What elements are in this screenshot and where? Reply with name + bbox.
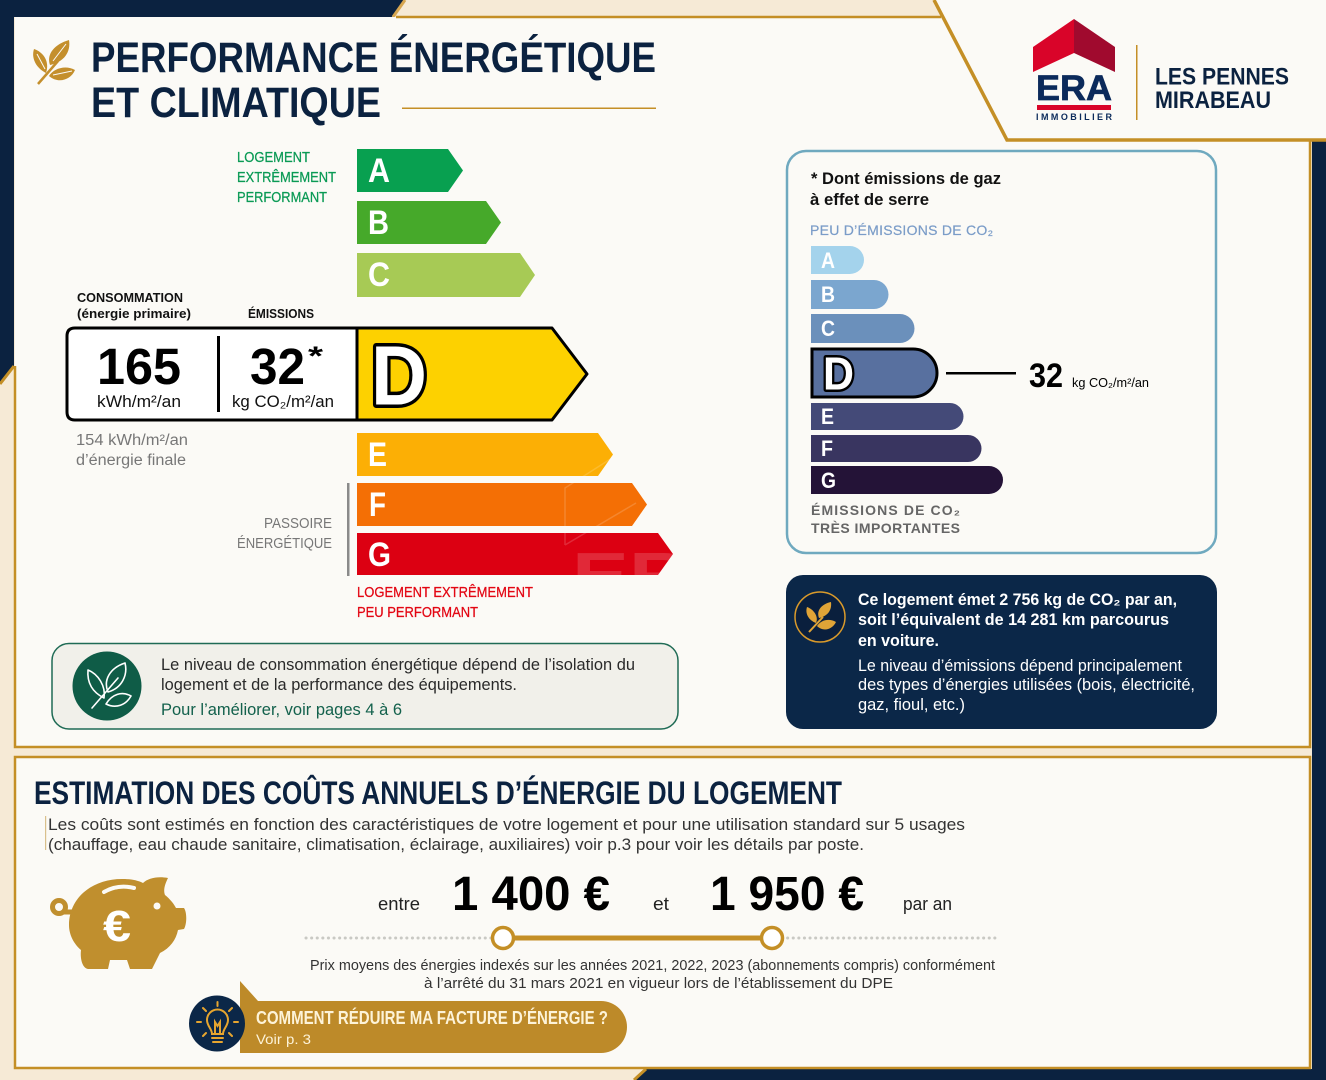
costs description: (chauffage, eau chaude sanitaire, climatisation, éclairage, auxiliaires) voir p.3 pour voir les détails par poste. [48, 835, 864, 854]
title rule [402, 108, 656, 109]
price range values: entre [378, 894, 420, 914]
costs description [45, 815, 965, 854]
energy bar D current: D [371, 328, 427, 422]
current rating box: * [308, 341, 324, 371]
final energy note: d’énergie finale [76, 452, 186, 469]
price range values: 1 950 € [710, 868, 864, 921]
logo: ERA Immobilier [1033, 19, 1115, 122]
price range scale [306, 928, 999, 948]
climate bar E: E [821, 404, 834, 429]
climate value [1029, 357, 1149, 395]
greenhouse gas heading [810, 169, 1001, 209]
energy bar A: A [368, 152, 390, 190]
label: high emissions: TRÈS IMPORTANTES [811, 520, 960, 536]
callout: emissions [786, 575, 1217, 729]
energy bar F: F [369, 486, 386, 524]
current rating box: kg CO₂/m²/an [232, 393, 334, 411]
climate bar D current: D [823, 348, 854, 400]
logo: ERA Immobilier: IMMOBILIER [1036, 112, 1112, 122]
costs description: Les coûts sont estimés en fonction des caractéristiques de votre logement et pour une utilisation standard sur 5 usages [48, 815, 965, 834]
panel: energy performance [15, 17, 1310, 747]
label: high performance: LOGEMENT [237, 150, 310, 166]
callout button: reduce bill [189, 981, 627, 1053]
callout: emissions: gaz, fioul, etc.) [858, 696, 965, 714]
greenhouse gas heading: * Dont émissions de gaz [811, 169, 1001, 188]
title [91, 34, 656, 127]
label: high emissions: ÉMISSIONS DE CO₂ [811, 502, 960, 518]
agency name: MIRABEAU [1155, 87, 1271, 114]
label: low performance [357, 584, 533, 621]
price range values: 1 400 € [452, 868, 610, 921]
callout: energy consumption: Le niveau de consommation énergétique dépend de l’isolation du [161, 655, 635, 674]
icon: light bulb [189, 996, 245, 1052]
label: high performance [237, 150, 336, 206]
energy bar B: B [368, 204, 389, 242]
consumption and emissions headings: CONSOMMATION [77, 290, 183, 305]
passoire rule [347, 483, 350, 576]
energy bar C [357, 253, 535, 297]
icon: green leaves [72, 652, 142, 720]
agency name: LES PENNES [1155, 64, 1289, 90]
climate value pointer [946, 372, 1016, 374]
watermark on bars [564, 458, 673, 575]
current rating box: kWh/m²/an [97, 393, 181, 411]
climate value: 32 [1029, 357, 1063, 395]
price footnote: Prix moyens des énergies indexés sur les années 2021, 2022, 2023 (abonnements compris) conformément [310, 958, 995, 974]
label: passoire energetique: PASSOIRE [264, 516, 332, 532]
callout: emissions: en voiture. [858, 632, 939, 650]
icon: piggy bank: € [103, 902, 131, 951]
label: low performance: LOGEMENT EXTRÊMEMENT [357, 584, 533, 601]
energy bar D current [357, 328, 587, 422]
final energy note [76, 432, 188, 469]
climate bar B: B [821, 282, 835, 307]
energy bar E [357, 433, 613, 476]
callout button: reduce bill: COMMENT RÉDUIRE MA FACTURE D’ÉNERGIE ? [256, 1007, 608, 1028]
callout: emissions: Ce logement émet 2 756 kg de CO₂ par an, [858, 591, 1177, 609]
consumption and emissions headings: ÉMISSIONS [248, 306, 314, 321]
energy bar C: C [368, 256, 390, 294]
climate bar A [811, 246, 864, 274]
energy bar B [357, 201, 501, 244]
label: passoire energetique [237, 516, 332, 552]
label: high emissions [811, 502, 960, 536]
consumption and emissions headings [77, 290, 314, 321]
price footnote: à l’arrêté du 31 mars 2021 en vigueur lors de l’établissement du DPE [424, 976, 893, 992]
climate bar E [811, 403, 964, 430]
panel: greenhouse gas [787, 151, 1216, 553]
price range values: par an [903, 894, 952, 914]
climate bar C [811, 314, 914, 343]
energy bar E: E [368, 436, 387, 474]
price range values [378, 868, 952, 921]
current rating box [67, 328, 357, 420]
energy bar F [357, 483, 647, 526]
panel: logo corner [934, 0, 1326, 140]
climate bar B [811, 280, 888, 309]
label: high performance: PERFORMANT [237, 190, 327, 206]
final energy note: 154 kWh/m²/an [76, 432, 188, 449]
current rating box: 32 [250, 338, 305, 395]
icon: piggy bank [52, 877, 186, 969]
logo divider [1136, 45, 1138, 120]
icon: leaf in gold circle [795, 592, 845, 642]
climate bar D current [812, 348, 937, 400]
title: ET CLIMATIQUE [91, 79, 381, 127]
energy bar A [357, 149, 463, 192]
agency name [1155, 64, 1289, 114]
climate bar F [811, 435, 982, 462]
price footnote [310, 958, 995, 992]
energy bar G [357, 533, 673, 575]
current rating box: 165 [97, 338, 181, 395]
logo: ERA Immobilier: ERA [1036, 69, 1112, 108]
climate bar G [811, 466, 1003, 494]
climate bar C: C [821, 316, 835, 341]
panel: energy costs [15, 757, 1310, 1068]
label: passoire energetique: ÉNERGÉTIQUE [237, 535, 332, 552]
energy bar G: G [368, 536, 391, 574]
callout: energy consumption: logement et de la performance des équipements. [161, 675, 517, 694]
greenhouse gas heading: à effet de serre [810, 190, 929, 209]
climate value: kg CO₂/m²/an [1072, 376, 1149, 390]
icon: gold leaves [33, 40, 75, 84]
label: low performance: PEU PERFORMANT [357, 605, 478, 621]
consumption and emissions headings: (énergie primaire) [77, 306, 191, 321]
climate bar F: F [821, 436, 833, 461]
callout: emissions: soit l’équivalent de 14 281 km parcourus [858, 611, 1169, 629]
climate bar A: A [821, 248, 835, 273]
callout: emissions: Le niveau d’émissions dépend principalement [858, 657, 1182, 675]
watermark on bars: ERA [572, 541, 752, 610]
price range values: et [653, 894, 669, 914]
callout: energy consumption: Pour l’améliorer, voir pages 4 à 6 [161, 700, 402, 719]
callout: energy consumption [52, 644, 678, 729]
heading: annual costs: ESTIMATION DES COÛTS ANNUELS D’ÉNERGIE DU LOGEMENT [34, 775, 842, 811]
climate bar G: G [821, 468, 836, 493]
callout button: reduce bill: Voir p. 3 [256, 1031, 311, 1047]
label: low emissions: PEU D’ÉMISSIONS DE CO₂ [810, 222, 993, 238]
title: PERFORMANCE ÉNERGÉTIQUE [91, 34, 656, 82]
label: high performance: EXTRÊMEMENT [237, 169, 336, 186]
callout: emissions: des types d’énergies utilisées (bois, électricité, [858, 676, 1195, 694]
